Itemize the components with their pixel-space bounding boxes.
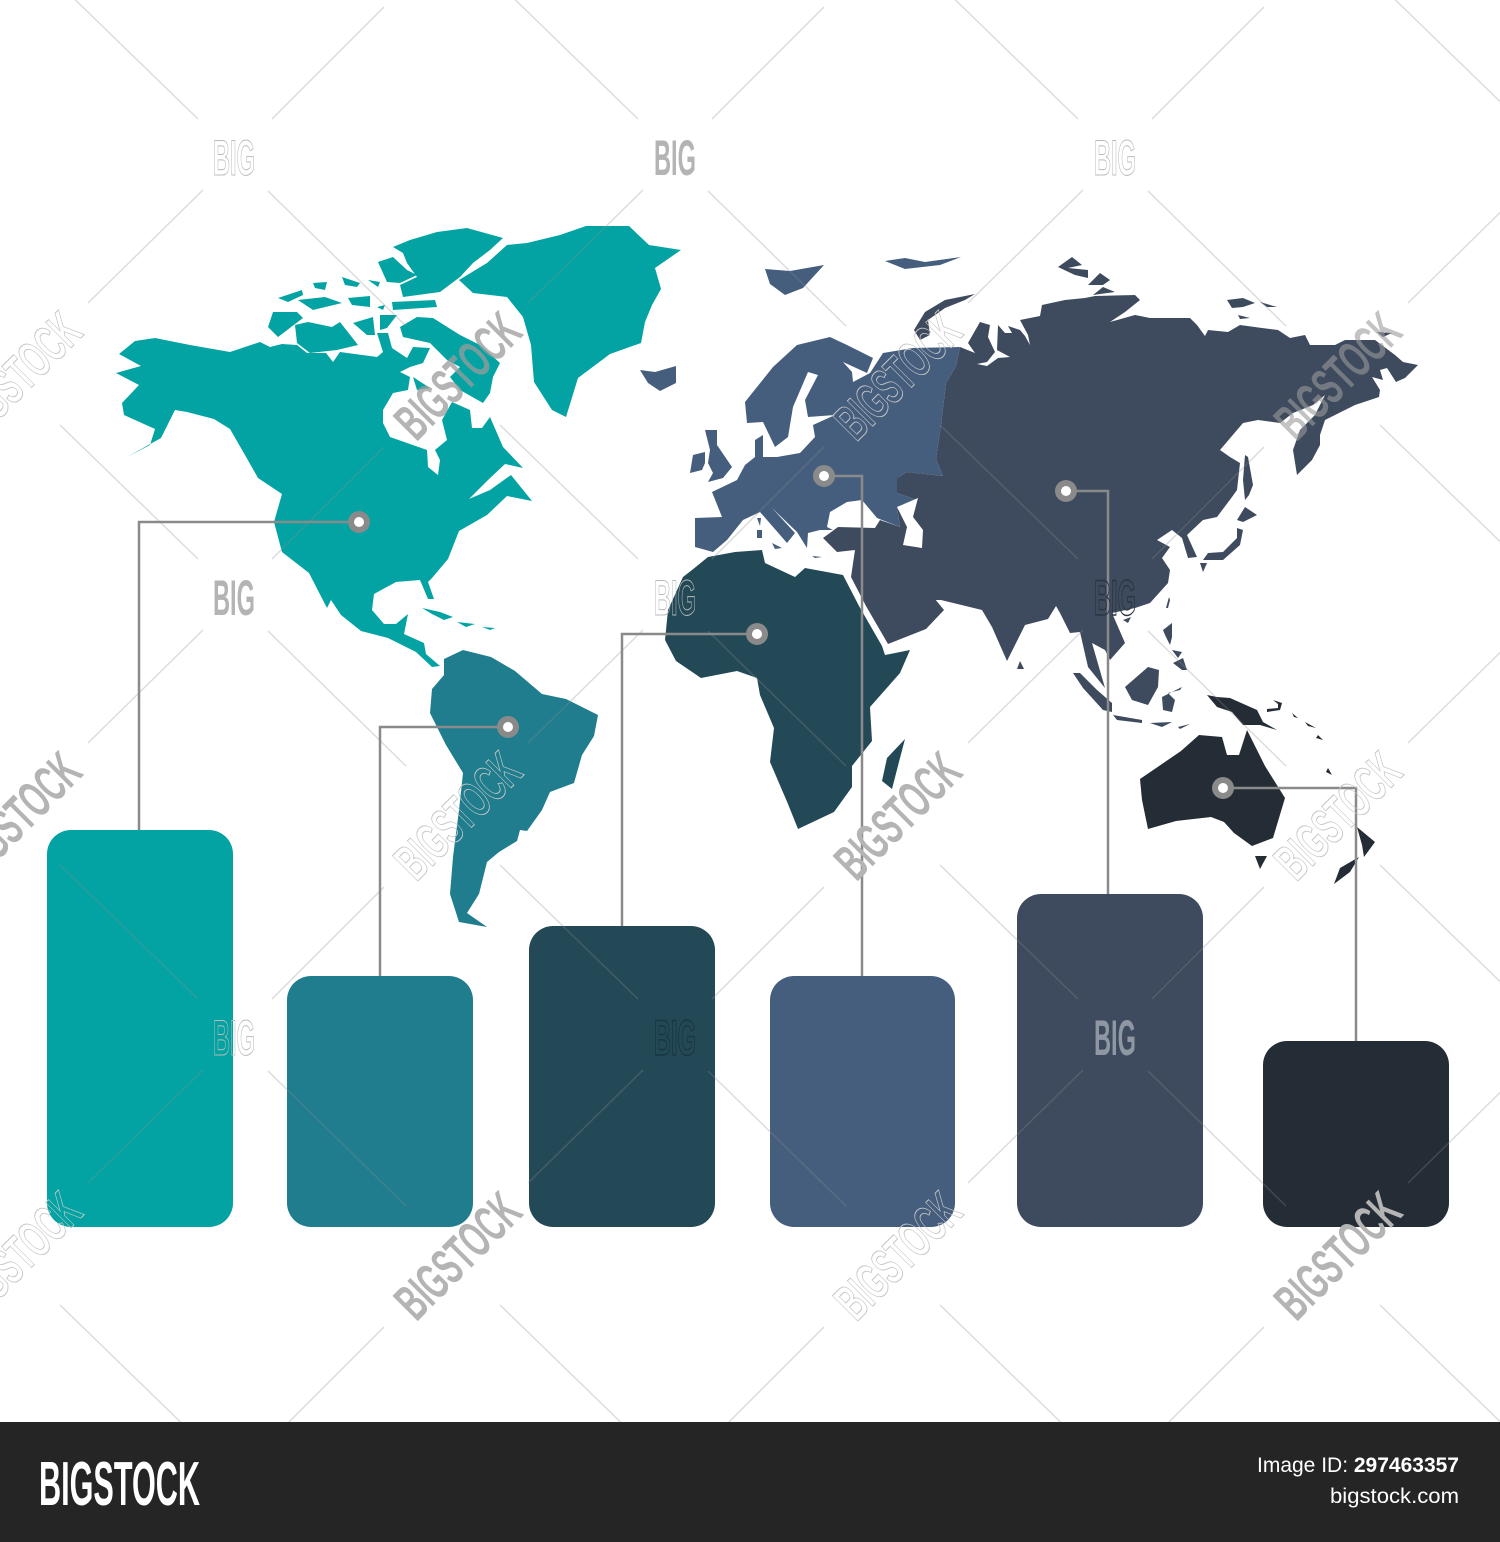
image id: Image ID: 297463357 [1257,1454,1459,1477]
watermark: BIGSTOCK diagonal labels: BIGSTOCK [384,302,533,451]
map: New Siberian Islands and Wrangel [1227,298,1392,337]
watermark: BIGSTOCK diagonal labels: BIGSTOCK [384,1182,533,1331]
watermark: BIGSTOCK diagonal labels: BIGSTOCK [824,1182,973,1331]
connector: Oceania [1212,777,1356,1041]
footer bar [0,1422,1500,1542]
connector: South America [380,716,519,976]
map: Iceland [640,366,676,391]
text: BIG [1094,1010,1136,1066]
map: Mediterranean islands [757,518,822,558]
map: Sulawesi [1162,687,1182,712]
connector: Europe [813,465,862,976]
map: Sumatra and Java [1073,673,1190,729]
watermark: BIG labels: BIG [654,130,696,186]
map: Taiwan and Hainan [1123,597,1170,623]
bar: Africa [529,926,715,1227]
bar: Europe [770,976,955,1227]
connector: North America [139,511,370,830]
map: Severnaya Zemlya [1058,257,1115,295]
map: Caspian Sea [897,498,923,548]
bar: South America [287,976,473,1227]
map: Madagascar [882,739,905,789]
watermark: BIGSTOCK diagonal labels: BIGSTOCK [1264,1182,1413,1331]
connector: Asia [1055,480,1108,894]
map: New Zealand [1334,827,1375,884]
bar: North America [47,830,233,1227]
text: BIG [1094,130,1136,186]
site url: bigstock.com [1330,1485,1459,1508]
watermark: BIG labels: BIG [654,570,696,626]
map: South America [430,650,598,927]
watermark: BIG labels: BIG [654,1010,696,1066]
watermark: BIGSTOCK diagonal labels [0,302,1413,1331]
map: Borneo [1125,667,1159,705]
map: Oceania [1140,695,1375,884]
watermark: BIG labels: BIG [213,570,255,626]
watermark: BIG labels: BIG [213,1010,255,1066]
map: Sri Lanka [1017,661,1024,669]
footer bar: BIGSTOCK [39,1450,200,1519]
watermark: BIGSTOCK diagonal labels: BIGSTOCK [1264,302,1413,451]
map: Arctic Canada islands [268,228,503,403]
map: North America [116,226,681,667]
map: British Isles [690,430,732,482]
bar: Oceania [1263,1041,1449,1227]
watermark: BIGSTOCK diagonal labels: BIGSTOCK [824,302,973,451]
text: BIG [1094,570,1136,626]
map: Europe [640,257,961,558]
watermark: BIG labels: BIG [213,130,255,186]
map: Australia [1140,730,1285,846]
watermark: BIGSTOCK diagonal labels: BIGSTOCK [1264,742,1413,891]
map: Africa [665,550,910,829]
watermark: BIGSTOCK diagonal labels: BIGSTOCK [824,742,973,891]
map: Asia [823,257,1418,729]
bar: Asia [1017,894,1203,1227]
map: Greenland [459,226,681,417]
connector: Africa [622,623,768,926]
map: Novaya Zemlya [914,294,975,340]
map: Cuba and Caribbean [422,608,495,630]
map: Philippines [1163,623,1187,670]
watermark: BIG labels [213,130,1136,1066]
map: Sakhalin and Japan [1200,455,1257,572]
map: Tasmania [1255,856,1267,869]
map: Svalbard and Franz Josef Land [765,257,961,295]
watermark: BIGSTOCK diagonal labels: BIGSTOCK [384,742,533,891]
map: Pacific islands [1267,700,1332,775]
